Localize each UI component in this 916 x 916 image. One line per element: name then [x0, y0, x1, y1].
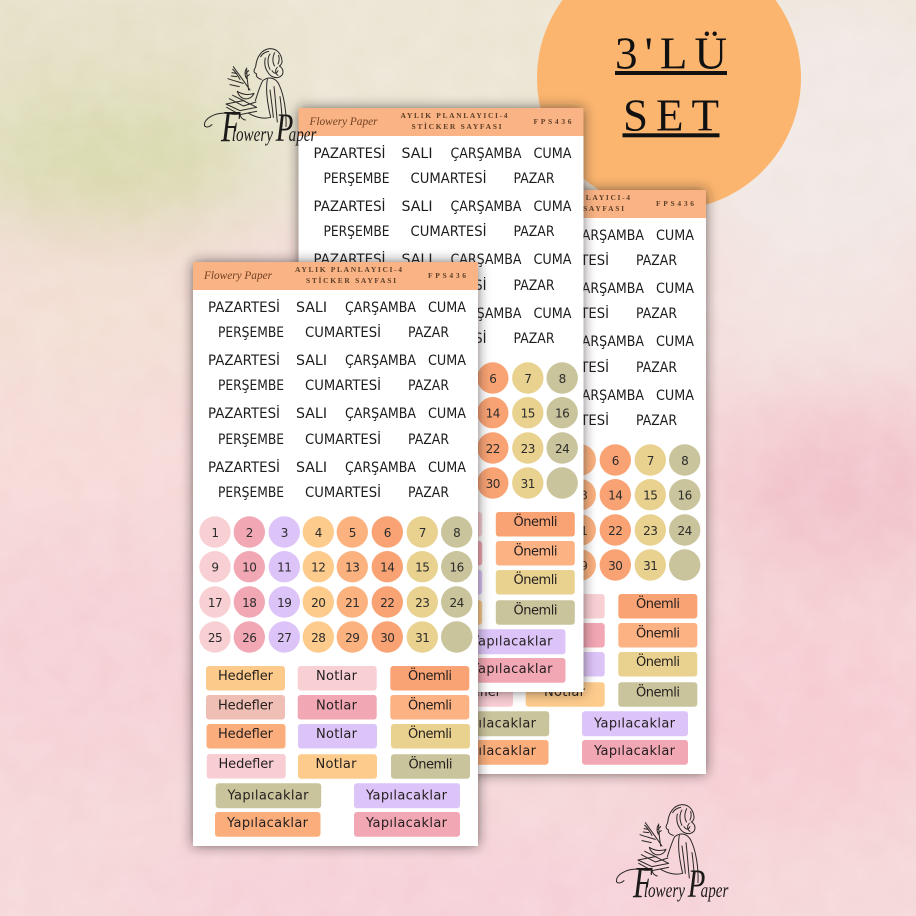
- weekday labels: PAZARTESİ: [314, 197, 386, 215]
- weekday labels: CUMA: [428, 300, 466, 316]
- weekday labels: PAZARTESİ: [314, 144, 386, 162]
- sheet header: [298, 108, 584, 136]
- date circles: 14: [608, 488, 622, 502]
- weekday labels: CUMARTESİ: [305, 376, 381, 394]
- weekday labels: SALI: [296, 353, 327, 369]
- date circles: 31: [521, 477, 535, 491]
- sheet header: [421, 190, 706, 218]
- date circles: 24: [678, 524, 692, 538]
- tag stickers: [206, 666, 470, 837]
- tag stickers: Hedefler: [218, 698, 274, 713]
- icon: woman holding books and plant: [204, 49, 286, 127]
- date circles: 6: [612, 454, 619, 468]
- sheet header: Flowery Paper: [309, 116, 378, 128]
- weekday labels: ÇARŞAMBA: [573, 388, 644, 404]
- date circles: 19: [277, 596, 291, 610]
- logo wordmark: aper: [289, 123, 317, 146]
- weekday labels: SALI: [402, 199, 432, 215]
- date circles: 2: [246, 526, 253, 540]
- weekday labels: PAZARTESİ: [208, 404, 280, 422]
- logo wordmark: P: [687, 861, 705, 906]
- weekday labels: SALI: [402, 146, 432, 162]
- weekday labels: CUMA: [428, 460, 466, 476]
- logo wordmark: P: [275, 105, 293, 150]
- date circles: 31: [415, 631, 429, 645]
- tag stickers: Yapılacaklar: [470, 634, 553, 649]
- weekday labels: ÇARŞAMBA: [450, 252, 522, 268]
- tag stickers: Notlar: [316, 669, 358, 684]
- weekday labels: CUMARTESİ: [533, 251, 609, 269]
- tag stickers: Önemli: [408, 725, 452, 742]
- sticker sheet: middle: [298, 108, 584, 692]
- date circles: [199, 516, 472, 653]
- weekday labels: PAZAR: [408, 485, 449, 501]
- weekday labels: ÇARŞAMBA: [573, 281, 644, 297]
- logo script swash: [616, 869, 651, 883]
- date circles: 4: [315, 526, 322, 540]
- date circles: 22: [486, 442, 500, 456]
- date circles: 6: [489, 372, 496, 386]
- logo wordmark: aper: [701, 879, 729, 902]
- date circles: 1: [211, 526, 219, 540]
- weekday labels: PAZAR: [514, 278, 555, 294]
- tag stickers: Yapılacaklar: [454, 744, 537, 759]
- weekday labels: [208, 298, 466, 501]
- date circles: [565, 444, 700, 581]
- tag stickers: Notlar: [316, 757, 357, 772]
- date circles: 11: [277, 560, 291, 574]
- sheet header: AYLIK PLANLAYICI-4: [523, 193, 630, 202]
- tag stickers: Notlar: [316, 698, 358, 713]
- weekday labels: PAZAR: [636, 413, 677, 429]
- date circles: 14: [486, 406, 500, 420]
- weekday labels: PAZAR: [636, 360, 677, 376]
- date circles: 14: [380, 560, 394, 574]
- weekday labels: CUMARTESİ: [305, 483, 381, 501]
- weekday labels: CUMA: [656, 228, 694, 244]
- date circles: 29: [345, 631, 359, 645]
- weekday labels: SALI: [402, 252, 432, 268]
- weekday labels: ÇARŞAMBA: [345, 353, 416, 369]
- date circles: 21: [573, 524, 587, 538]
- weekday labels: SALI: [296, 460, 327, 476]
- weekday labels: CUMARTESİ: [533, 304, 609, 322]
- tag stickers: Notlar: [544, 685, 586, 700]
- date circles: 28: [311, 631, 325, 645]
- date circles: 3: [281, 526, 288, 540]
- date circles: 31: [643, 559, 657, 573]
- date circles: 10: [242, 560, 256, 574]
- tag stickers: Önemli: [514, 602, 558, 618]
- weekday labels: CUMA: [534, 306, 572, 322]
- tag stickers: Önemli: [636, 624, 680, 641]
- date circles: 8: [453, 526, 460, 540]
- weekday labels: PAZARTESİ: [208, 298, 280, 316]
- weekday labels: CUMARTESİ: [410, 276, 486, 294]
- weekday labels: ÇARŞAMBA: [450, 199, 522, 215]
- tag stickers: Önemli: [408, 667, 452, 684]
- tag stickers: Yapılacaklar: [365, 816, 448, 831]
- weekday labels: ÇARŞAMBA: [345, 406, 416, 422]
- tag stickers: Notlar: [316, 727, 358, 742]
- date circles: 23: [415, 596, 429, 610]
- weekday labels: CUMA: [656, 334, 694, 350]
- date circles: 30: [380, 631, 394, 645]
- weekday labels: CUMARTESİ: [410, 222, 486, 240]
- weekday labels: PAZAR: [514, 224, 555, 240]
- date circles: 15: [521, 406, 535, 420]
- weekday labels: CUMARTESİ: [305, 430, 381, 448]
- date circles: 30: [486, 477, 500, 491]
- logo wordmark: lowery: [232, 123, 274, 146]
- tag stickers: Hedefler: [218, 757, 274, 772]
- tag stickers: Önemli: [636, 684, 680, 700]
- weekday labels: PAZAR: [636, 253, 677, 269]
- weekday labels: ÇARŞAMBA: [450, 306, 522, 322]
- weekday labels: PERŞEMBE: [324, 171, 390, 187]
- weekday labels: CUMARTESİ: [410, 329, 486, 347]
- weekday labels: PERŞEMBE: [218, 378, 284, 394]
- weekday labels: PERŞEMBE: [218, 432, 284, 448]
- sheet header: FPS436: [428, 271, 466, 280]
- weekday labels: CUMARTESİ: [533, 411, 609, 429]
- weekday labels: PAZAR: [408, 378, 449, 394]
- weekday labels: [533, 228, 694, 429]
- date circles: 30: [608, 559, 622, 573]
- orange badge circle: [537, 0, 801, 210]
- date circles: 7: [647, 454, 654, 468]
- weekday labels: ÇARŞAMBA: [450, 146, 522, 162]
- badge title: 3'LÜ SET: [615, 28, 727, 140]
- weekday labels: SALI: [296, 406, 327, 422]
- date circles: 13: [573, 488, 587, 502]
- date circles: 29: [573, 559, 587, 573]
- tag stickers: Önemli: [636, 595, 680, 612]
- date circles: 15: [643, 488, 657, 502]
- badge title: 3'LÜ SET: 3'LÜ: [615, 28, 727, 78]
- weekday labels: PAZAR: [636, 306, 677, 322]
- sheet header: STİCKER SAYFASI: [412, 121, 502, 131]
- weekday labels: CUMARTESİ: [533, 358, 609, 376]
- date circles: 21: [345, 596, 359, 610]
- tag stickers: Yapılacaklar: [593, 716, 676, 731]
- date circles: 5: [349, 526, 356, 540]
- tag stickers: Yapılacaklar: [226, 816, 309, 831]
- weekday labels: PAZAR: [408, 325, 449, 341]
- weekday labels: CUMA: [656, 388, 694, 404]
- tag stickers: Önemli: [636, 653, 680, 670]
- weekday labels: CUMARTESİ: [410, 169, 486, 187]
- date circles: [477, 362, 578, 499]
- weekday labels: CUMARTESİ: [305, 323, 381, 341]
- date circles: 7: [524, 372, 531, 386]
- tag stickers: Yapılacaklar: [226, 788, 309, 803]
- date circles: 9: [211, 560, 219, 574]
- date circles: 16: [678, 488, 692, 502]
- tag stickers: Yapılacaklar: [365, 788, 448, 803]
- tag stickers: Hedefler: [446, 685, 502, 700]
- date circles: 23: [521, 442, 535, 456]
- weekday labels: PERŞEMBE: [218, 325, 284, 341]
- sheet header: FPS436: [656, 199, 694, 208]
- icon: woman holding books and plant: [616, 805, 698, 883]
- weekday labels: ÇARŞAMBA: [573, 228, 644, 244]
- weekday labels: PERŞEMBE: [218, 485, 284, 501]
- weekday labels: CUMA: [428, 406, 466, 422]
- tag stickers: Hedefler: [218, 669, 274, 684]
- tag stickers: Yapılacaklar: [470, 662, 553, 677]
- sheet header: AYLIK PLANLAYICI-4: [295, 265, 402, 274]
- weekday labels: CUMA: [656, 281, 694, 297]
- tag stickers: Yapılacaklar: [593, 744, 676, 759]
- weekday labels: [314, 144, 572, 347]
- date circles: 12: [311, 560, 325, 574]
- date circles: 5: [577, 454, 584, 468]
- weekday labels: CUMA: [428, 353, 466, 369]
- logo script swash: [204, 113, 239, 127]
- sticker sheet: front: [193, 262, 478, 846]
- weekday labels: PERŞEMBE: [324, 224, 390, 240]
- date circles: 20: [311, 596, 325, 610]
- logo wordmark: lowery: [644, 879, 686, 902]
- weekday labels: CUMA: [534, 199, 572, 215]
- date circles: 22: [380, 596, 394, 610]
- date circles: 24: [450, 596, 464, 610]
- date circles: 8: [681, 454, 688, 468]
- weekday labels: ÇARŞAMBA: [345, 300, 416, 316]
- weekday labels: PAZARTESİ: [208, 458, 280, 476]
- tag stickers: Hedefler: [218, 727, 274, 742]
- tag stickers: Yapılacaklar: [454, 716, 537, 731]
- date circles: 13: [345, 560, 359, 574]
- tag stickers: [403, 512, 575, 683]
- badge title: 3'LÜ SET: SET: [623, 90, 719, 140]
- tag stickers: Önemli: [514, 542, 558, 559]
- tag stickers: Önemli: [514, 513, 558, 530]
- logo wordmark: F: [632, 859, 653, 907]
- date circles: 15: [415, 560, 429, 574]
- date circles: 24: [555, 442, 569, 456]
- weekday labels: PAZAR: [514, 171, 555, 187]
- weekday labels: PAZARTESİ: [208, 351, 280, 369]
- date circles: 17: [208, 596, 222, 610]
- logo: Flowery Paper top: [204, 49, 317, 151]
- date circles: 22: [608, 524, 622, 538]
- weekday labels: ÇARŞAMBA: [573, 334, 644, 350]
- date circles: 16: [450, 560, 464, 574]
- date circles: 27: [277, 631, 291, 645]
- logo: Flowery Paper bottom: [616, 805, 729, 907]
- tag stickers: [434, 594, 697, 765]
- sheet header: FPS436: [534, 117, 572, 126]
- sheet header: Flowery Paper: [203, 270, 273, 282]
- weekday labels: PAZAR: [514, 331, 555, 347]
- tag stickers: Önemli: [514, 571, 558, 588]
- weekday labels: CUMA: [534, 252, 572, 268]
- weekday labels: CUMA: [534, 146, 572, 162]
- logo wordmark: F: [220, 103, 241, 151]
- date circles: 6: [384, 526, 391, 540]
- date circles: 16: [555, 406, 569, 420]
- sheet header: STİCKER SAYFASI: [306, 275, 396, 285]
- date circles: 25: [208, 631, 222, 645]
- weekday labels: PAZARTESİ: [314, 250, 386, 268]
- date circles: 7: [419, 526, 426, 540]
- weekday labels: PAZAR: [408, 432, 449, 448]
- sticker sheet: back: [421, 190, 706, 774]
- date circles: 26: [242, 631, 256, 645]
- date circles: 18: [242, 596, 256, 610]
- tag stickers: Önemli: [408, 756, 452, 772]
- sheet header: STİCKER SAYFASI: [534, 203, 624, 213]
- sheet header: [193, 262, 478, 290]
- sheet header: AYLIK PLANLAYICI-4: [400, 111, 508, 120]
- weekday labels: SALI: [296, 300, 327, 316]
- weekday labels: ÇARŞAMBA: [345, 460, 416, 476]
- date circles: 23: [643, 524, 657, 538]
- date circles: 8: [559, 372, 566, 386]
- tag stickers: Önemli: [408, 696, 452, 713]
